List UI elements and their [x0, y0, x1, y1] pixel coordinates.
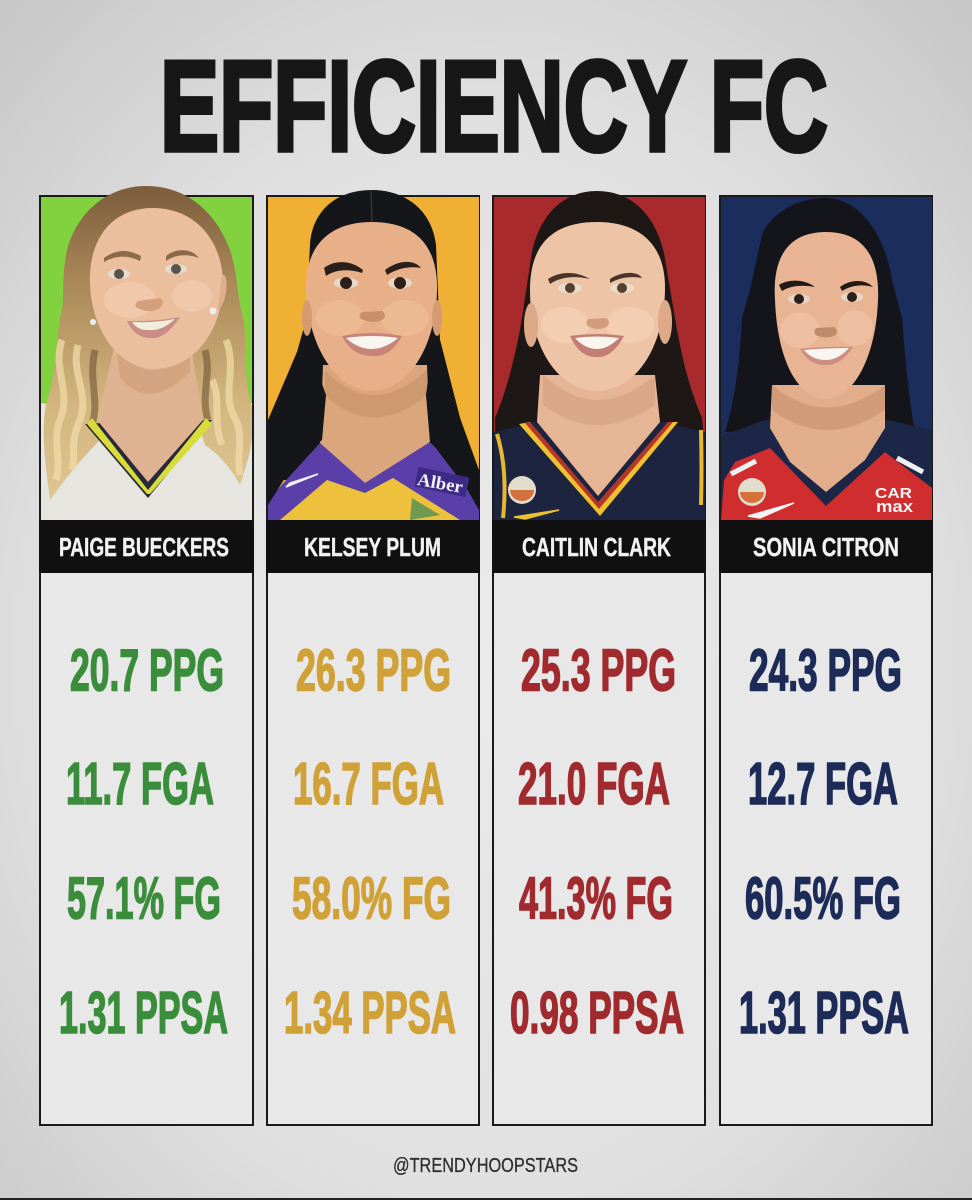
- bottom edge line: [0, 1198, 972, 1200]
- stat: points per game: 25.3 PPG: [521, 638, 676, 704]
- panel: Kelsey Plum: [266, 190, 480, 1125]
- card frame: [40, 196, 253, 1125]
- name: SONIA CITRON: [753, 532, 899, 562]
- name: KELSEY PLUM: [304, 532, 441, 562]
- stat: field goal percentage: 41.3% FG: [519, 866, 673, 932]
- name: PAIGE BUECKERS: [59, 532, 229, 562]
- photo: Caitlin Clark: [494, 191, 705, 520]
- photo: Sonia Citron: max: [876, 497, 914, 516]
- stat: field goal percentage: 57.1% FG: [67, 866, 221, 932]
- panel: Caitlin Clark: [492, 191, 706, 1125]
- card frame: [267, 196, 479, 1125]
- photo: Sonia Citron: CAR: [875, 485, 912, 502]
- stat: field goal attempts: 11.7 FGA: [66, 751, 214, 817]
- panel: Paige Bueckers: [39, 186, 254, 1125]
- stat: points per shot attempt: 1.31 PPSA: [59, 980, 228, 1046]
- name bar: [266, 520, 480, 573]
- card frame: [493, 196, 705, 1125]
- name bar: [39, 520, 254, 573]
- photo: Kelsey Plum: [268, 190, 479, 520]
- stat: points per game: 20.7 PPG: [70, 638, 224, 704]
- card frame: [720, 196, 932, 1125]
- stat: field goal percentage: 58.0% FG: [292, 866, 451, 932]
- footer credit: @TRENDYHOOPSTARS: [393, 1155, 578, 1177]
- panel: Sonia Citron: [719, 196, 933, 1125]
- stat: field goal attempts: 16.7 FGA: [293, 751, 444, 817]
- photo: Paige Bueckers: [41, 186, 253, 520]
- name bar: [492, 520, 706, 573]
- stat: field goal attempts: 21.0 FGA: [518, 751, 670, 817]
- name bar: [719, 520, 933, 573]
- photo: Kelsey Plum: Alber: [416, 469, 465, 497]
- name: CAITLIN CLARK: [522, 532, 671, 562]
- stat: points per shot attempt: 0.98 PPSA: [510, 980, 684, 1046]
- photo: Sonia Citron: [721, 197, 932, 520]
- stat: points per game: 26.3 PPG: [296, 638, 451, 704]
- stat: points per shot attempt: 1.34 PPSA: [284, 980, 456, 1046]
